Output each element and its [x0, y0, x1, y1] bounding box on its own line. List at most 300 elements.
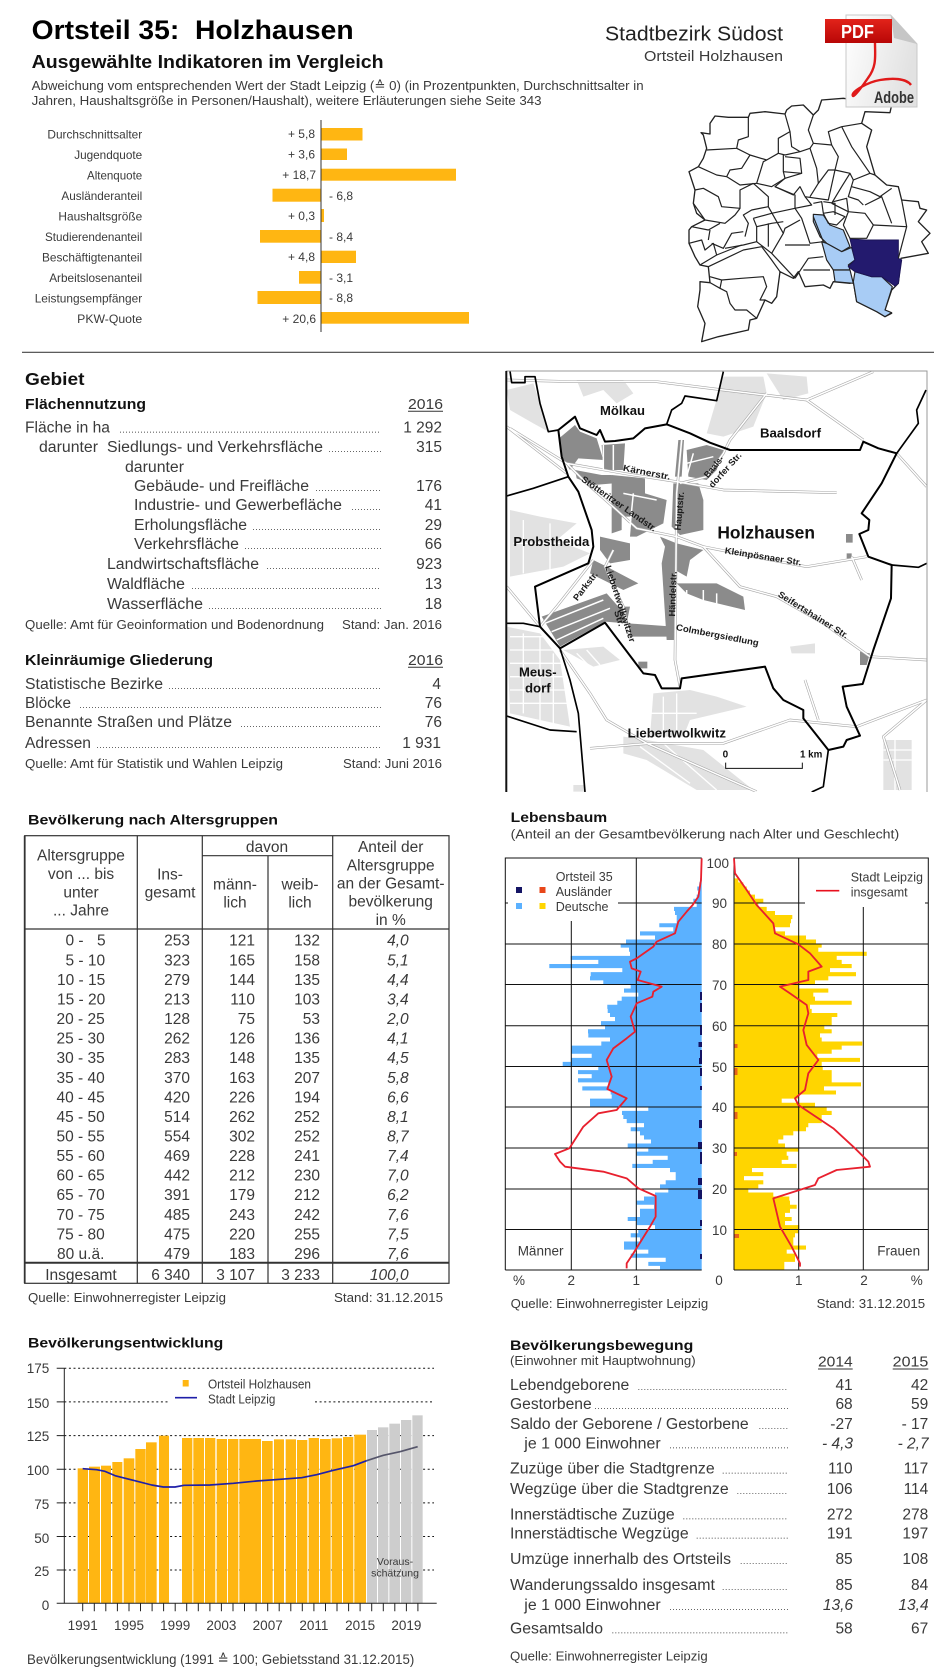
- land use rows: 315: [416, 439, 442, 456]
- table rows: 136: [294, 1031, 320, 1048]
- scale bar: 1 km: [800, 750, 822, 761]
- table rows: 296: [294, 1246, 320, 1263]
- values 2014: 110: [828, 1461, 853, 1478]
- values 2014: 272: [827, 1506, 853, 1523]
- table rows: 179: [229, 1187, 255, 1204]
- rows: Blöcke: [25, 695, 71, 712]
- x axis labels: 1991: [68, 1618, 98, 1633]
- values 2015: - 2,7: [898, 1435, 930, 1452]
- indicator labels: Beschäftigtenanteil: [42, 250, 142, 264]
- table rows: 40 - 45: [56, 1089, 105, 1106]
- title: Ortsteil 35: Holzhausen: [32, 15, 354, 45]
- legend: [175, 1377, 311, 1407]
- land use rows: 176: [416, 478, 442, 495]
- table rows: 7,0: [387, 1168, 409, 1185]
- table rows: 2,0: [386, 1011, 409, 1028]
- forecast label: [371, 1556, 419, 1580]
- row labels: Gestorbene: [510, 1396, 592, 1413]
- year headers: 2014: [818, 1354, 853, 1371]
- indicator labels: Leistungsempfänger: [35, 292, 142, 306]
- indicator values: + 5,8: [288, 127, 315, 141]
- values 2014: 41: [835, 1377, 853, 1394]
- gender labels: [518, 1244, 920, 1259]
- row labels: je 1 000 Einwohner: [523, 1597, 661, 1614]
- table rows: 262: [164, 1031, 190, 1048]
- table rows: 469: [164, 1148, 190, 1165]
- row labels: Innerstädtische Zuzüge: [510, 1506, 675, 1523]
- street names: Kleinpösnaer Str.: [724, 545, 802, 567]
- table header: unter: [63, 884, 99, 901]
- table rows: 242: [294, 1207, 320, 1224]
- land use rows: Verkehrsfläche: [134, 536, 239, 553]
- rows: 4: [432, 676, 441, 693]
- forecast label: Voraus-: [377, 1556, 414, 1568]
- land use rows: 923: [416, 556, 442, 573]
- city comparison lines: [555, 858, 870, 1268]
- table rows: 252: [294, 1109, 320, 1126]
- table rows: 253: [164, 933, 190, 950]
- table rows: 7,6: [387, 1246, 409, 1263]
- table header: von ... bis: [48, 866, 114, 883]
- panel: population by age table: [25, 811, 449, 1305]
- values 2015: 59: [911, 1396, 928, 1413]
- total row: 3 107: [216, 1267, 255, 1284]
- heading: Bevölkerungsentwicklung: [28, 1335, 223, 1351]
- land use rows: Wasserfläche: [107, 596, 203, 613]
- table rows: 475: [164, 1226, 190, 1243]
- age axis labels: 90: [712, 896, 727, 911]
- legend: Stadt Leipzig: Stadt Leipzig: [851, 870, 923, 884]
- icon: Adobe PDF document: [825, 15, 917, 107]
- x axis labels: 2007: [253, 1618, 283, 1633]
- table rows: 132: [294, 933, 320, 950]
- percent axis labels: %: [911, 1273, 923, 1288]
- bars: [258, 128, 469, 324]
- table rows: 194: [294, 1089, 320, 1106]
- heading: Kleinräumige Gliederung: [25, 653, 213, 669]
- panel: Bevölkerungsentwicklung chart: [27, 1335, 437, 1667]
- land use rows: Industrie- und Gewerbefläche: [134, 497, 342, 514]
- percent axis labels: 1: [633, 1273, 640, 1288]
- street names: [571, 450, 850, 648]
- street grid in neighbouring areas: [510, 520, 912, 790]
- land use rows: darunter: [39, 439, 98, 456]
- y axis labels: 175: [27, 1361, 49, 1376]
- foreign residents markers: [698, 992, 702, 1259]
- place names: Meus-: [519, 665, 557, 680]
- heading: Bevölkerung nach Altersgruppen: [28, 811, 278, 827]
- table rows: 20 - 25: [56, 1011, 105, 1028]
- bars: Ortsteil Holzhausen: [78, 1435, 366, 1603]
- values 2015: - 17: [902, 1416, 928, 1433]
- indicator labels: Arbeitslosenanteil: [49, 271, 142, 285]
- indicator values: + 0,3: [288, 209, 315, 223]
- heading: (Anteil an der Gesamtbevölkerung nach Alter und Geschlecht): [511, 827, 899, 842]
- table rows: 121: [229, 933, 255, 950]
- table rows: 60 - 65: [56, 1168, 105, 1185]
- indicator labels: Studierendenanteil: [45, 230, 142, 244]
- table rows: 4,5: [387, 1050, 409, 1067]
- values 2014: 85: [835, 1577, 853, 1594]
- percent axis labels: [513, 1273, 923, 1288]
- source line: [25, 757, 442, 771]
- row labels: Wanderungssaldo insgesamt: [510, 1577, 716, 1594]
- place names: [513, 403, 822, 741]
- indicator values: - 8,4: [329, 230, 353, 244]
- row labels: [510, 1377, 788, 1637]
- table rows: 5 - 10: [66, 952, 106, 969]
- description text: Jahren, Haushaltsgröße in Personen/Haushalt), weitere Erläuterungen siehe Seite 343: [32, 93, 542, 108]
- table rows: 135: [294, 1050, 320, 1067]
- year headers: [818, 1354, 928, 1371]
- table grid: [25, 836, 449, 1283]
- street names: Parkstr.: [571, 570, 600, 603]
- table rows: 10 - 15: [57, 972, 105, 989]
- bar chart: indicators deviation: [35, 120, 469, 332]
- indicator values: [282, 127, 353, 326]
- table rows: 279: [164, 972, 190, 989]
- rows: Benannte Straßen und Plätze: [25, 714, 232, 731]
- table rows: 479: [164, 1246, 190, 1263]
- age axis labels: 10: [712, 1223, 727, 1238]
- table rows: 255: [294, 1226, 320, 1243]
- table rows: 7,6: [387, 1207, 409, 1224]
- heading: Bevölkerungsbewegung: [510, 1337, 693, 1353]
- table rows: 103: [294, 991, 320, 1008]
- panel: Kleinräumige Gliederung: [25, 652, 443, 771]
- table header: männ-: [213, 876, 257, 893]
- table rows: 8,7: [387, 1128, 410, 1146]
- table rows: 514: [164, 1109, 190, 1126]
- table rows: 241: [294, 1148, 320, 1165]
- land use rows: 1 292: [403, 420, 442, 437]
- neighbouring district boundaries: [507, 371, 927, 792]
- table rows: 442: [164, 1168, 190, 1185]
- highlighted district Holzhausen: [848, 239, 902, 286]
- table rows: 35 - 40: [56, 1070, 105, 1087]
- table rows: 15 - 20: [57, 991, 106, 1008]
- source line: Stand: 31.12.2015: [334, 1291, 443, 1305]
- x axis labels: [68, 1618, 421, 1633]
- table header: ... Jahre: [53, 903, 109, 920]
- table rows: 554: [164, 1128, 190, 1146]
- table rows: 6,6: [387, 1089, 409, 1106]
- source line: Stand: Jan. 2016: [342, 618, 442, 632]
- place names: Mölkau: [600, 403, 645, 418]
- indicator labels: Durchschnittsalter: [47, 128, 142, 142]
- table rows: 53: [303, 1011, 320, 1028]
- values 2015: 108: [902, 1551, 928, 1568]
- table rows: 213: [164, 991, 190, 1008]
- values 2014: - 4,3: [822, 1435, 853, 1452]
- table rows: 212: [294, 1187, 320, 1204]
- table header: an der Gesamt-: [337, 875, 445, 892]
- table header: [37, 839, 445, 929]
- indicator labels: Ausländeranteil: [61, 189, 142, 203]
- indicator labels: Haushaltsgröße: [58, 210, 143, 224]
- table header: lich: [288, 895, 312, 912]
- y axis labels: 0: [42, 1598, 49, 1613]
- table rows: 3,4: [387, 991, 409, 1008]
- values 2015: [898, 1377, 930, 1637]
- x axis labels: 2015: [345, 1618, 375, 1633]
- y axis labels: [27, 1361, 49, 1613]
- y axis labels: 150: [27, 1396, 49, 1411]
- description text: Abweichung vom entsprechenden Wert der Stadt Leipzig (≙ 0) (in Prozentpunkten, Durchschnittsalter in: [32, 78, 644, 93]
- heading: Flächennutzung: Flächennutzung: [25, 397, 146, 413]
- place names: dorf: [525, 680, 551, 695]
- table rows: 5: [97, 933, 106, 950]
- land use rows: Fläche in ha: [25, 420, 110, 437]
- indicator labels: [35, 128, 143, 326]
- total row: Insgesamt: [45, 1267, 117, 1284]
- table header: Ins-: [157, 866, 183, 883]
- table rows: 370: [164, 1070, 190, 1087]
- scale bar: [723, 750, 822, 768]
- x axis labels: 2019: [391, 1618, 421, 1633]
- indicator values: + 18,7: [282, 168, 316, 182]
- heading: (Einwohner mit Hauptwohnung): [510, 1353, 696, 1368]
- icon: Adobe PDF document: PDF: [841, 22, 874, 42]
- table header: bevölkerung: [348, 894, 433, 911]
- rows: Adressen: [25, 735, 91, 752]
- indicator values: + 20,6: [282, 312, 316, 326]
- age axis labels: 60: [712, 1019, 727, 1034]
- values 2014: 106: [827, 1481, 853, 1498]
- values 2014: 13,6: [823, 1597, 853, 1614]
- source line: Quelle: Amt für Statistik und Wahlen Leipzig: [25, 757, 283, 771]
- legend: Ortsteil 35: [516, 870, 613, 914]
- table rows: 4,1: [387, 1031, 409, 1048]
- street names: dorfer Str.: [707, 450, 744, 490]
- table header: in %: [376, 912, 406, 929]
- subtitle: selected indicators: Ausgewählte Indikatoren im Vergleich: [32, 52, 384, 72]
- land use rows: Siedlungs- und Verkehrsfläche: [107, 439, 323, 456]
- percent axis labels: 1: [795, 1273, 802, 1288]
- table rows: 485: [164, 1207, 190, 1224]
- table rows: 126: [229, 1031, 255, 1048]
- table rows: 226: [229, 1089, 255, 1106]
- values 2015: 42: [911, 1377, 928, 1394]
- table rows: 135: [294, 972, 320, 989]
- district heading: [605, 24, 783, 65]
- table rows: 228: [229, 1148, 255, 1165]
- indicator values: - 6,8: [329, 189, 353, 203]
- description text: [32, 78, 644, 108]
- table rows: 0 -: [66, 933, 84, 950]
- rows: Statistische Bezirke: [25, 676, 163, 693]
- table rows: 262: [229, 1109, 255, 1126]
- land use rows: darunter: [125, 459, 184, 476]
- age axis labels: 20: [712, 1182, 727, 1197]
- land use rows: Landwirtschaftsfläche: [107, 556, 259, 573]
- place names: Probstheida: [513, 534, 590, 549]
- street names: Seifertshainer Str.: [776, 589, 850, 641]
- source line: Stand: Juni 2016: [343, 757, 442, 771]
- land use rows: 18: [425, 596, 442, 613]
- icon: Adobe PDF document: Adobe: [874, 88, 914, 107]
- table rows: 5,1: [387, 952, 409, 969]
- row labels: Wegzüge über die Stadtgrenze: [510, 1481, 729, 1498]
- heading: Flächennutzung: 2016: [408, 396, 443, 413]
- source line: Quelle: Einwohnerregister Leipzig: [511, 1297, 708, 1311]
- total row: [45, 1267, 409, 1284]
- source line: [28, 1291, 443, 1305]
- values 2014: 58: [835, 1620, 853, 1637]
- table rows: 4,0: [387, 933, 409, 950]
- street names: Händelstr.: [667, 571, 679, 617]
- y axis labels: 75: [34, 1497, 49, 1512]
- values 2015: 117: [904, 1461, 928, 1478]
- values 2015: 278: [902, 1506, 928, 1523]
- table rows: 128: [164, 1011, 190, 1028]
- rows: 1 931: [402, 735, 441, 752]
- indicator values: + 3,6: [288, 148, 315, 162]
- source line: Stand: 31.12.2015: [817, 1297, 925, 1311]
- x axis labels: 1995: [114, 1618, 144, 1633]
- values 2015: 13,4: [898, 1597, 929, 1614]
- age axis labels: 30: [712, 1141, 727, 1156]
- table rows: 158: [294, 952, 320, 969]
- age axis labels: 40: [712, 1100, 727, 1115]
- indicator labels: Altenquote: [87, 168, 143, 182]
- Holzhausen boundary: [535, 417, 897, 750]
- bars: men: [549, 878, 702, 1270]
- legend: Ortsteil 35: Ausländer: [556, 885, 612, 899]
- total row: 3 233: [281, 1267, 320, 1284]
- y axis labels: 50: [34, 1531, 49, 1546]
- rows: 76: [425, 714, 442, 731]
- street names: Kärnerstr.: [622, 463, 671, 482]
- land use rows: 13: [425, 576, 442, 593]
- legend: Stadt Leipzig: insgesamt: [851, 886, 908, 900]
- gridlines: [64, 1368, 434, 1570]
- table rows: 163: [229, 1070, 255, 1087]
- inner district boundaries: [689, 114, 907, 318]
- table rows: 65 - 70: [56, 1187, 105, 1204]
- table rows: 55 - 60: [56, 1148, 105, 1165]
- row labels: je 1 000 Einwohner: [523, 1435, 661, 1452]
- panel: Bevölkerungsbewegung table: [510, 1337, 930, 1664]
- land use rows: 29: [425, 517, 442, 534]
- values 2015: 114: [904, 1481, 929, 1498]
- district heading: Stadtbezirk Südost: [605, 24, 783, 46]
- gender labels: Männer: [518, 1244, 564, 1259]
- place names: Holzhausen: [717, 522, 815, 542]
- legend: Ortsteil 35: Deutsche: [556, 900, 609, 914]
- street names: Stötteritzer Landstr.: [580, 474, 658, 534]
- foreign women markers: [734, 1044, 739, 1238]
- land use rows: Waldfläche: [107, 576, 185, 593]
- table header: davon: [246, 839, 288, 856]
- table rows: 75: [238, 1011, 255, 1028]
- y axis labels: 25: [34, 1564, 49, 1579]
- x axis labels: 2003: [206, 1618, 236, 1633]
- age axis labels: 50: [712, 1060, 727, 1075]
- table rows: 207: [294, 1070, 320, 1087]
- values 2015: 197: [902, 1526, 928, 1543]
- legend: Ortsteil 35: Ortsteil 35: [556, 870, 613, 884]
- land use rows: Gebäude- und Freifläche: [134, 478, 309, 495]
- bars: forecast: [367, 1415, 423, 1603]
- table rows: 8,1: [387, 1109, 409, 1126]
- scale bar: 0: [723, 750, 729, 761]
- heading: [511, 809, 899, 842]
- table rows: 4,4: [387, 972, 409, 989]
- percent axis labels: 2: [568, 1273, 575, 1288]
- land use rows: [25, 420, 442, 613]
- legend: Stadt Leipzig: [208, 1392, 275, 1407]
- table rows: 110: [230, 991, 255, 1008]
- table rows: [56, 933, 410, 1263]
- table rows: 391: [164, 1187, 190, 1204]
- heading: 2016: [408, 652, 443, 669]
- row labels: Umzüge innerhalb des Ortsteils: [510, 1551, 731, 1568]
- highlighted neighbour districts: [813, 214, 892, 317]
- values 2015: 84: [911, 1577, 929, 1594]
- values 2014: [822, 1377, 853, 1637]
- table rows: 420: [164, 1089, 190, 1106]
- values 2014: 68: [835, 1396, 853, 1413]
- gender labels: Frauen: [877, 1244, 920, 1259]
- source line: Quelle: Amt für Geoinformation und Bodenordnung: [25, 618, 324, 632]
- place names: Baalsdorf: [760, 426, 822, 441]
- age axis labels: 100: [706, 856, 729, 871]
- indicator values: - 8,8: [329, 291, 353, 305]
- age axis labels: 80: [712, 937, 727, 952]
- legend: Ortsteil Holzhausen: [208, 1377, 311, 1392]
- table rows: 7,5: [387, 1226, 409, 1243]
- y axis labels: 125: [27, 1429, 49, 1444]
- heading: [510, 1337, 696, 1368]
- table rows: 323: [164, 952, 190, 969]
- percent axis labels: 2: [860, 1273, 868, 1288]
- year headers: 2015: [893, 1354, 928, 1371]
- district heading: Ortsteil Holzhausen: [644, 49, 783, 65]
- table rows: 148: [229, 1050, 255, 1067]
- heading: Gebiet: Gebiet: [25, 369, 85, 389]
- y axis labels: 100: [27, 1463, 49, 1478]
- table rows: 80 u.ä.: [57, 1246, 104, 1263]
- table rows: 243: [229, 1207, 255, 1224]
- table header: lich: [223, 895, 247, 912]
- row labels: Innerstädtische Wegzüge: [510, 1526, 689, 1543]
- table rows: 220: [229, 1226, 255, 1243]
- table header: Altersgruppe: [347, 857, 435, 874]
- indicator labels: PKW-Quote: [77, 312, 143, 326]
- table rows: 183: [229, 1246, 255, 1263]
- table rows: 45 - 50: [56, 1109, 105, 1126]
- source line: [511, 1297, 925, 1311]
- street names: Liebertwolkwitzer: [603, 564, 637, 644]
- rows: 76: [425, 695, 442, 712]
- table rows: 302: [229, 1128, 255, 1146]
- age axis labels: 70: [712, 978, 727, 993]
- row labels: Zuzüge über die Stadtgrenze: [510, 1461, 715, 1478]
- age axis labels: [706, 856, 729, 1238]
- street names: Hauptstr.: [673, 491, 686, 531]
- table rows: 7,4: [387, 1148, 409, 1165]
- row labels: Saldo der Geborene / Gestorbene: [510, 1416, 749, 1433]
- total row: 6 340: [151, 1267, 190, 1284]
- table rows: 5,8: [387, 1070, 409, 1087]
- table rows: 230: [294, 1168, 320, 1185]
- legend: Stadt Leipzig: [816, 870, 923, 900]
- x axis labels: 2011: [299, 1618, 328, 1633]
- table rows: 165: [229, 952, 255, 969]
- x axis labels: 1999: [160, 1618, 190, 1633]
- land use rows: 41: [425, 497, 442, 514]
